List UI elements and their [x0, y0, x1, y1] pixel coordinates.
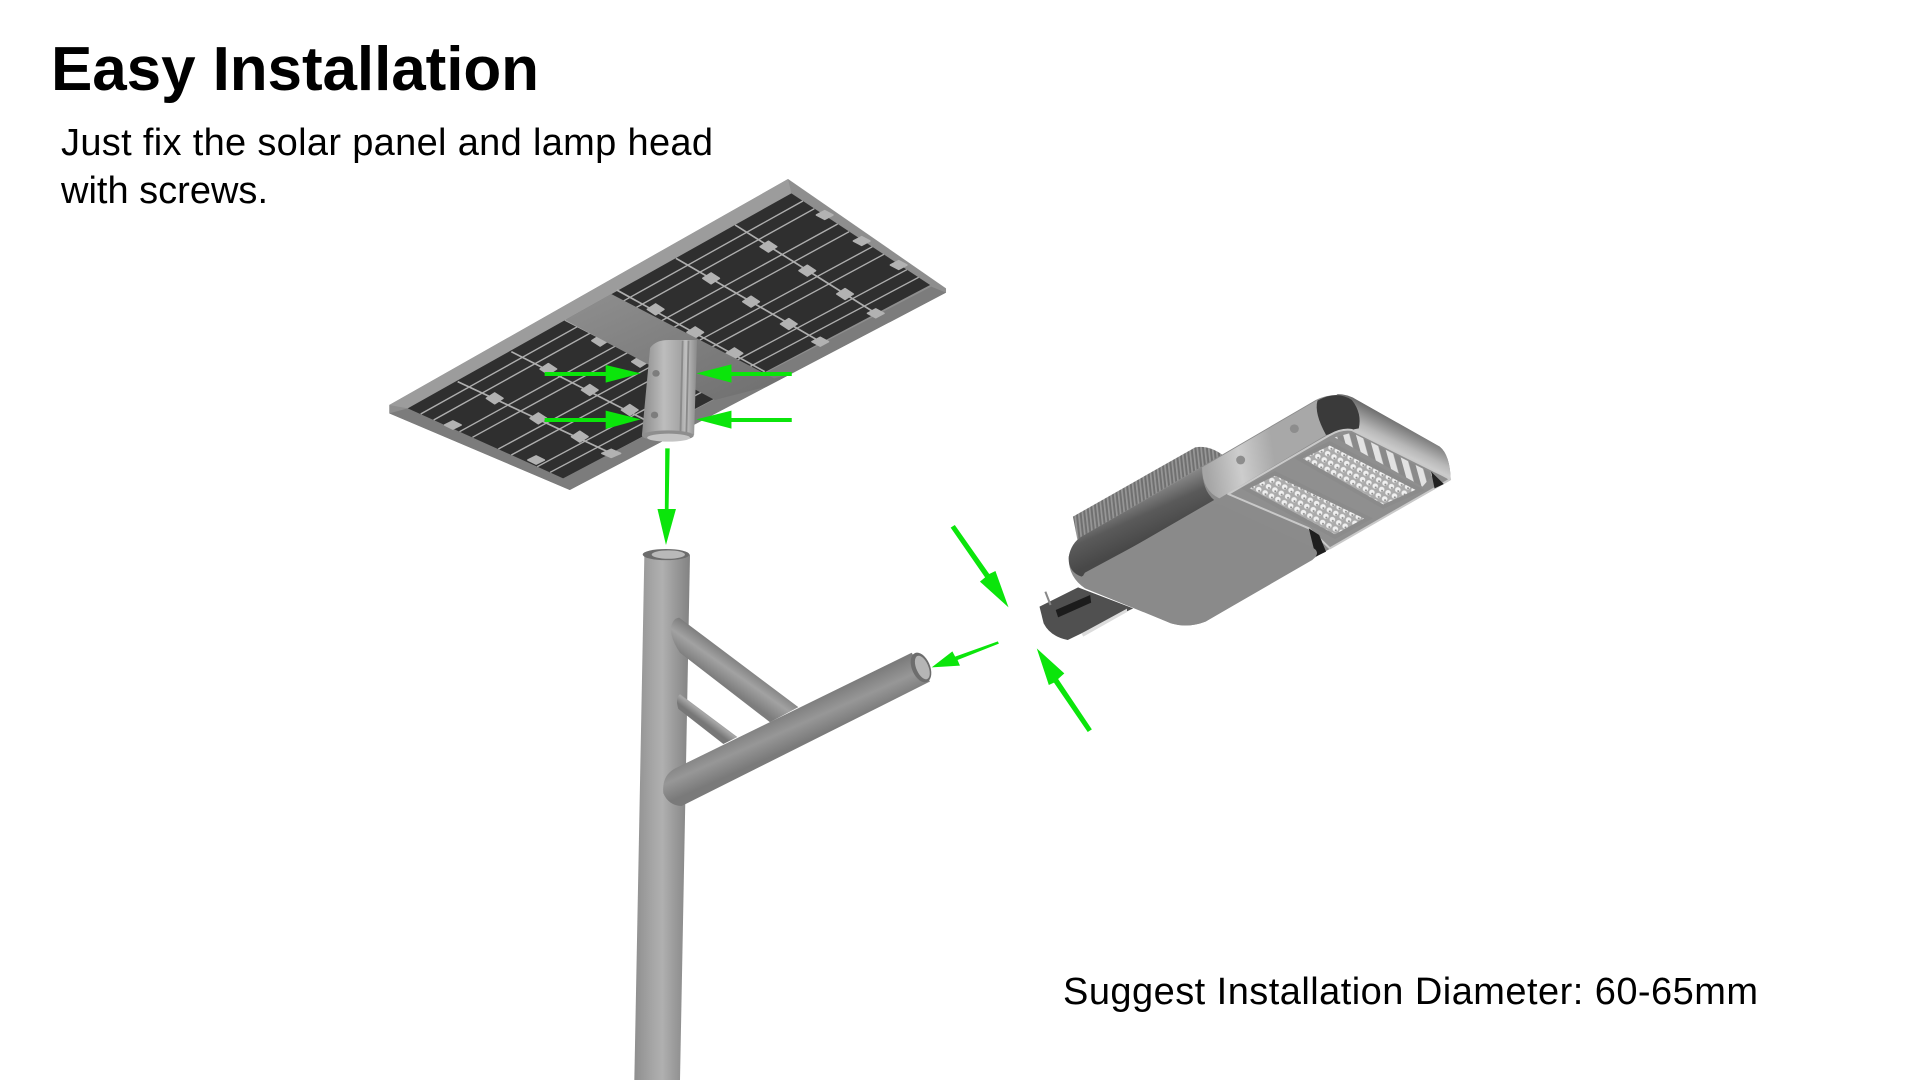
cover plate shadow — [1309, 528, 1326, 557]
shell dark side — [1069, 467, 1214, 577]
end cap shadow — [1317, 395, 1360, 435]
arrow upper right — [696, 364, 792, 383]
lamp shell — [1069, 395, 1451, 625]
LED module 1 — [1298, 443, 1420, 507]
heat sink fins — [1073, 447, 1223, 543]
lamp fixing arrows — [932, 525, 1092, 732]
pole with arm — [634, 549, 935, 1080]
cell junction diamonds — [445, 211, 907, 464]
mounting socket — [1040, 587, 1133, 640]
side arm — [663, 653, 930, 806]
shell right end — [1336, 394, 1451, 489]
arrow lower — [1037, 648, 1092, 732]
arrow to arm — [932, 641, 999, 667]
flat cover plate — [1082, 504, 1317, 625]
mounting plate — [565, 294, 791, 400]
shell light side — [1202, 400, 1326, 498]
arrow down into pole — [657, 448, 676, 545]
arrow upper — [951, 525, 1009, 607]
bolts — [1236, 424, 1299, 464]
LED module 2 — [1245, 473, 1368, 537]
description text — [60, 122, 713, 212]
end reflector shadow — [1431, 472, 1444, 488]
arrow upper left — [545, 365, 641, 383]
pole shaft — [634, 555, 690, 1080]
description text: with screws. — [60, 170, 268, 212]
arrow lower right — [696, 411, 792, 429]
solar cells — [408, 193, 930, 478]
description text: Just fix the solar panel and lamp head — [61, 122, 713, 164]
upper brace — [671, 618, 798, 722]
panel frame — [389, 179, 946, 490]
diameter note: Suggest Installation Diameter: 60-65mm — [1063, 971, 1758, 1013]
solar panel assembly — [389, 179, 946, 545]
pole clamp — [642, 340, 697, 442]
reflector ribs — [1335, 433, 1433, 487]
title: Easy Installation — [51, 35, 539, 104]
LED recess — [1228, 430, 1450, 548]
arrow lower left — [545, 411, 641, 429]
arrows: screw fixing and drop-in — [545, 364, 792, 545]
cell lines — [421, 201, 919, 472]
arm end opening — [907, 649, 935, 686]
lamp head — [1040, 394, 1451, 640]
pole top opening — [643, 549, 689, 560]
lower brace — [677, 694, 737, 744]
